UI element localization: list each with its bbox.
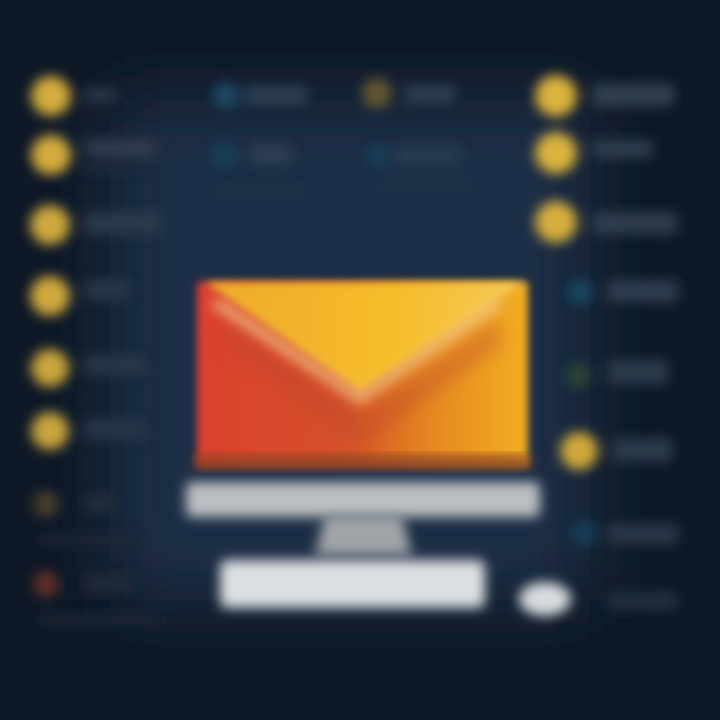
monitor envelope screen: [195, 282, 530, 468]
top center list items: [211, 78, 470, 195]
keyboard: [220, 560, 485, 608]
monitor neck: [315, 515, 412, 555]
mouse: [519, 582, 571, 616]
monitor stand and base: [186, 482, 540, 555]
monitor bezel bar: [186, 482, 540, 517]
right column of list items: [535, 75, 678, 610]
left column of list items: [30, 76, 160, 625]
envelope flap: [205, 282, 525, 392]
envelope fold shadow: [225, 320, 500, 445]
envelope flap edge: [215, 302, 500, 398]
envelope bottom shadow: [195, 456, 530, 468]
envelope body: [197, 282, 528, 466]
